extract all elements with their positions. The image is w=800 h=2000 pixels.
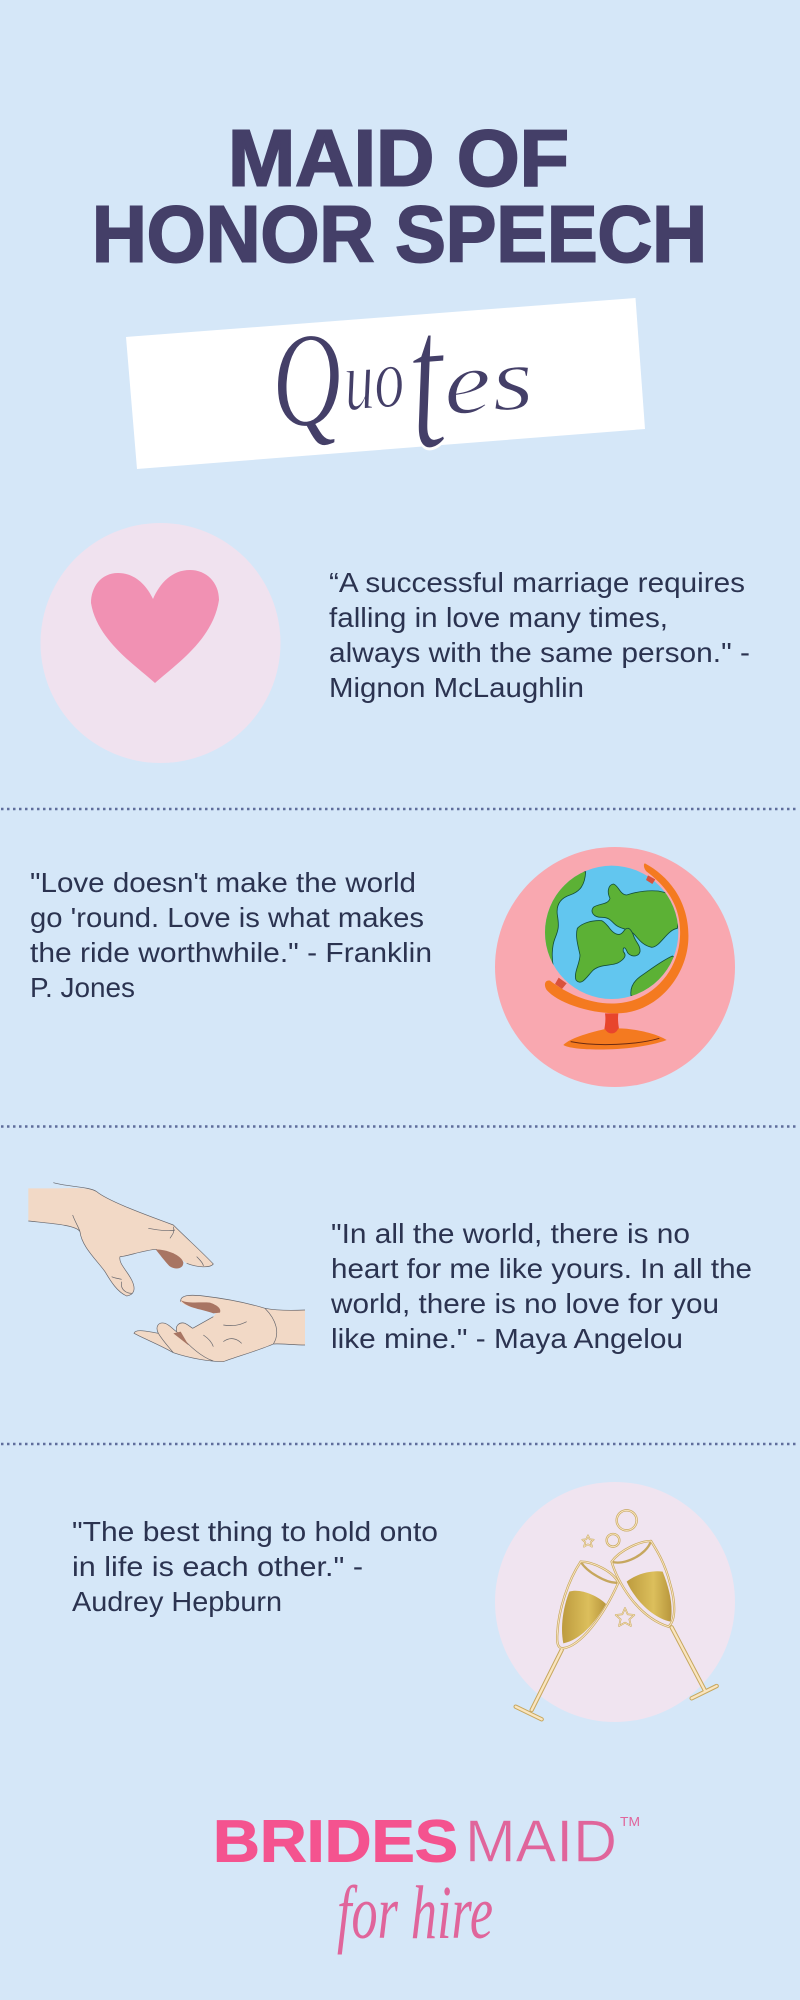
banner script word: Q: [266, 304, 347, 458]
banner script word: es: [439, 329, 537, 435]
quote text 2: go 'round. Love is what makes: [30, 902, 424, 933]
quote text 1: falling in love many times,: [329, 602, 668, 633]
quote text 1: Mignon McLaughlin: [329, 672, 584, 703]
quote text 4: in life is each other." -: [72, 1551, 363, 1582]
quote text 4: Audrey Hepburn: [72, 1586, 282, 1617]
icon: reaching hands: [28, 1183, 305, 1362]
logo: Bridesmaid for hire: [213, 1808, 640, 1955]
banner script word: uo: [340, 329, 407, 429]
quote text 2: P. Jones: [30, 972, 135, 1003]
logo script tagline: for hire: [337, 1871, 493, 1955]
panel: quote 3: [28, 1183, 760, 1362]
title: HONOR SPEECH: [92, 190, 707, 278]
icon circle: pale lilac: [495, 1482, 735, 1722]
title: [92, 114, 707, 278]
icon circle: pink: [495, 847, 735, 1087]
logo wordmark: MAID: [465, 1808, 617, 1874]
panel: quote 1: [40, 523, 758, 763]
quote text 3: heart for me like yours. In all the: [331, 1253, 752, 1284]
quote text 3: world, there is no love for you: [330, 1288, 719, 1319]
panel: quote 4: [72, 1482, 735, 1722]
panel: quote 2: [30, 847, 735, 1087]
quote text 3: like mine." - Maya Angelou: [331, 1323, 683, 1354]
icon: heart: [91, 570, 219, 683]
quote text 3: "In all the world, there is no: [331, 1218, 690, 1249]
icon: globe: [537, 863, 688, 1050]
quote text 1: always with the same person." -: [329, 637, 750, 668]
icon circle: pale pink: [40, 523, 280, 763]
banner: Quotes: [126, 262, 645, 502]
quote text 4: "The best thing to hold onto: [72, 1516, 438, 1547]
icon: champagne glasses: [516, 1510, 717, 1719]
quote text 2: "Love doesn't make the world: [30, 867, 416, 898]
title: MAID OF: [228, 114, 569, 202]
banner script word: t: [399, 269, 455, 492]
quote text 2: the ride worthwhile." - Franklin: [30, 937, 432, 968]
logo wordmark: BRIDES: [213, 1808, 458, 1874]
trademark mark: TM: [620, 1814, 640, 1829]
quote text 1: “A successful marriage requires: [329, 567, 745, 598]
